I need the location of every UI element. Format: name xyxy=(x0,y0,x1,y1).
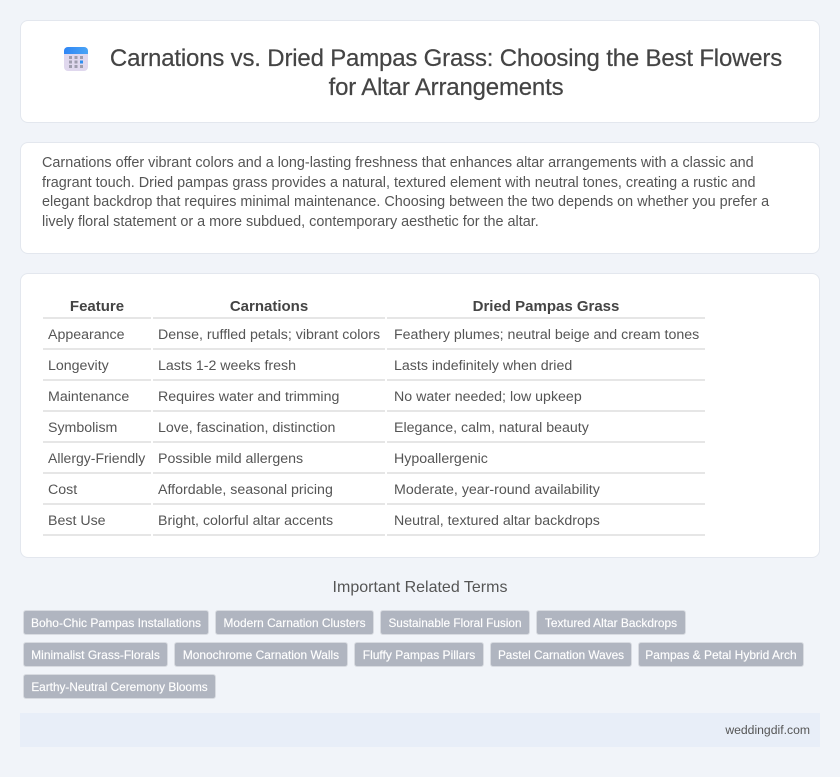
table rows: Neutral, textured altar backdrops xyxy=(394,513,600,529)
table rows: Feathery plumes; neutral beige and cream tones xyxy=(394,327,699,343)
table rows: Elegance, calm, natural beauty xyxy=(394,420,589,436)
table rows: Moderate, year-round availability xyxy=(394,482,600,498)
title: Carnations vs. Dried Pampas Grass: Choosing the Best Flowers xyxy=(110,45,782,72)
table rows: Lasts indefinitely when dried xyxy=(394,358,572,374)
table rows: Symbolism xyxy=(48,420,117,436)
related term tags: Fluffy Pampas Pillars xyxy=(363,648,475,662)
table rows: Affordable, seasonal pricing xyxy=(158,482,333,498)
table rows: Maintenance xyxy=(48,389,129,405)
comparison table panel xyxy=(20,273,820,558)
related term tags: Textured Altar Backdrops xyxy=(545,616,677,630)
icon: calendar xyxy=(64,47,88,71)
table header xyxy=(70,298,619,315)
related term tags: Minimalist Grass-Florals xyxy=(31,648,160,662)
related term tags: Monochrome Carnation Walls xyxy=(183,648,339,662)
related term tags: Pastel Carnation Waves xyxy=(498,648,624,662)
intro paragraph: lively floral statement or a more subdued, contemporary aesthetic for the altar. xyxy=(42,214,539,230)
table rows: Bright, colorful altar accents xyxy=(158,513,333,529)
related term tags: Modern Carnation Clusters xyxy=(223,616,366,630)
table rows: Love, fascination, distinction xyxy=(158,420,335,436)
table rows: No water needed; low upkeep xyxy=(394,389,582,405)
footer source text: weddingdif.com xyxy=(725,723,810,737)
table rows: Hypoallergenic xyxy=(394,451,488,467)
intro paragraph xyxy=(42,155,770,230)
title: for Altar Arrangements xyxy=(329,74,563,101)
intro paragraph: elegant backdrop that requires minimal maintenance. Choosing between the two depends on whether you prefer a xyxy=(42,194,769,210)
related term tags: Sustainable Floral Fusion xyxy=(388,616,522,630)
table header: Carnations xyxy=(230,298,308,315)
table rows: Appearance xyxy=(48,327,125,343)
table rows xyxy=(43,317,705,536)
table header: Feature xyxy=(70,298,124,315)
table rows: Allergy-Friendly xyxy=(48,450,145,466)
table rows: Longevity xyxy=(48,358,109,374)
intro paragraph: Carnations offer vibrant colors and a long-lasting freshness that enhances altar arrangements with a classic and xyxy=(42,155,754,171)
header panel xyxy=(20,20,820,123)
table rows: Possible mild allergens xyxy=(158,451,303,467)
intro paragraph: fragrant touch. Dried pampas grass provides a natural, textured element with neutral tones, creating a rustic and xyxy=(42,175,756,191)
table rows: Best Use xyxy=(48,513,106,529)
table rows: Cost xyxy=(48,482,77,498)
related terms heading: Important Related Terms xyxy=(333,579,507,596)
table rows: Requires water and trimming xyxy=(158,389,339,405)
related term tags xyxy=(23,610,804,699)
table rows: Lasts 1-2 weeks fresh xyxy=(158,358,296,374)
table header: Dried Pampas Grass xyxy=(473,298,619,315)
intro text panel xyxy=(20,142,820,254)
related term tags: Pampas & Petal Hybrid Arch xyxy=(645,648,797,662)
related term tags: Earthy-Neutral Ceremony Blooms xyxy=(31,680,208,694)
title xyxy=(110,45,782,101)
table rows: Dense, ruffled petals; vibrant colors xyxy=(158,327,380,343)
footer bar xyxy=(20,713,820,747)
related term tags: Boho-Chic Pampas Installations xyxy=(31,616,201,630)
